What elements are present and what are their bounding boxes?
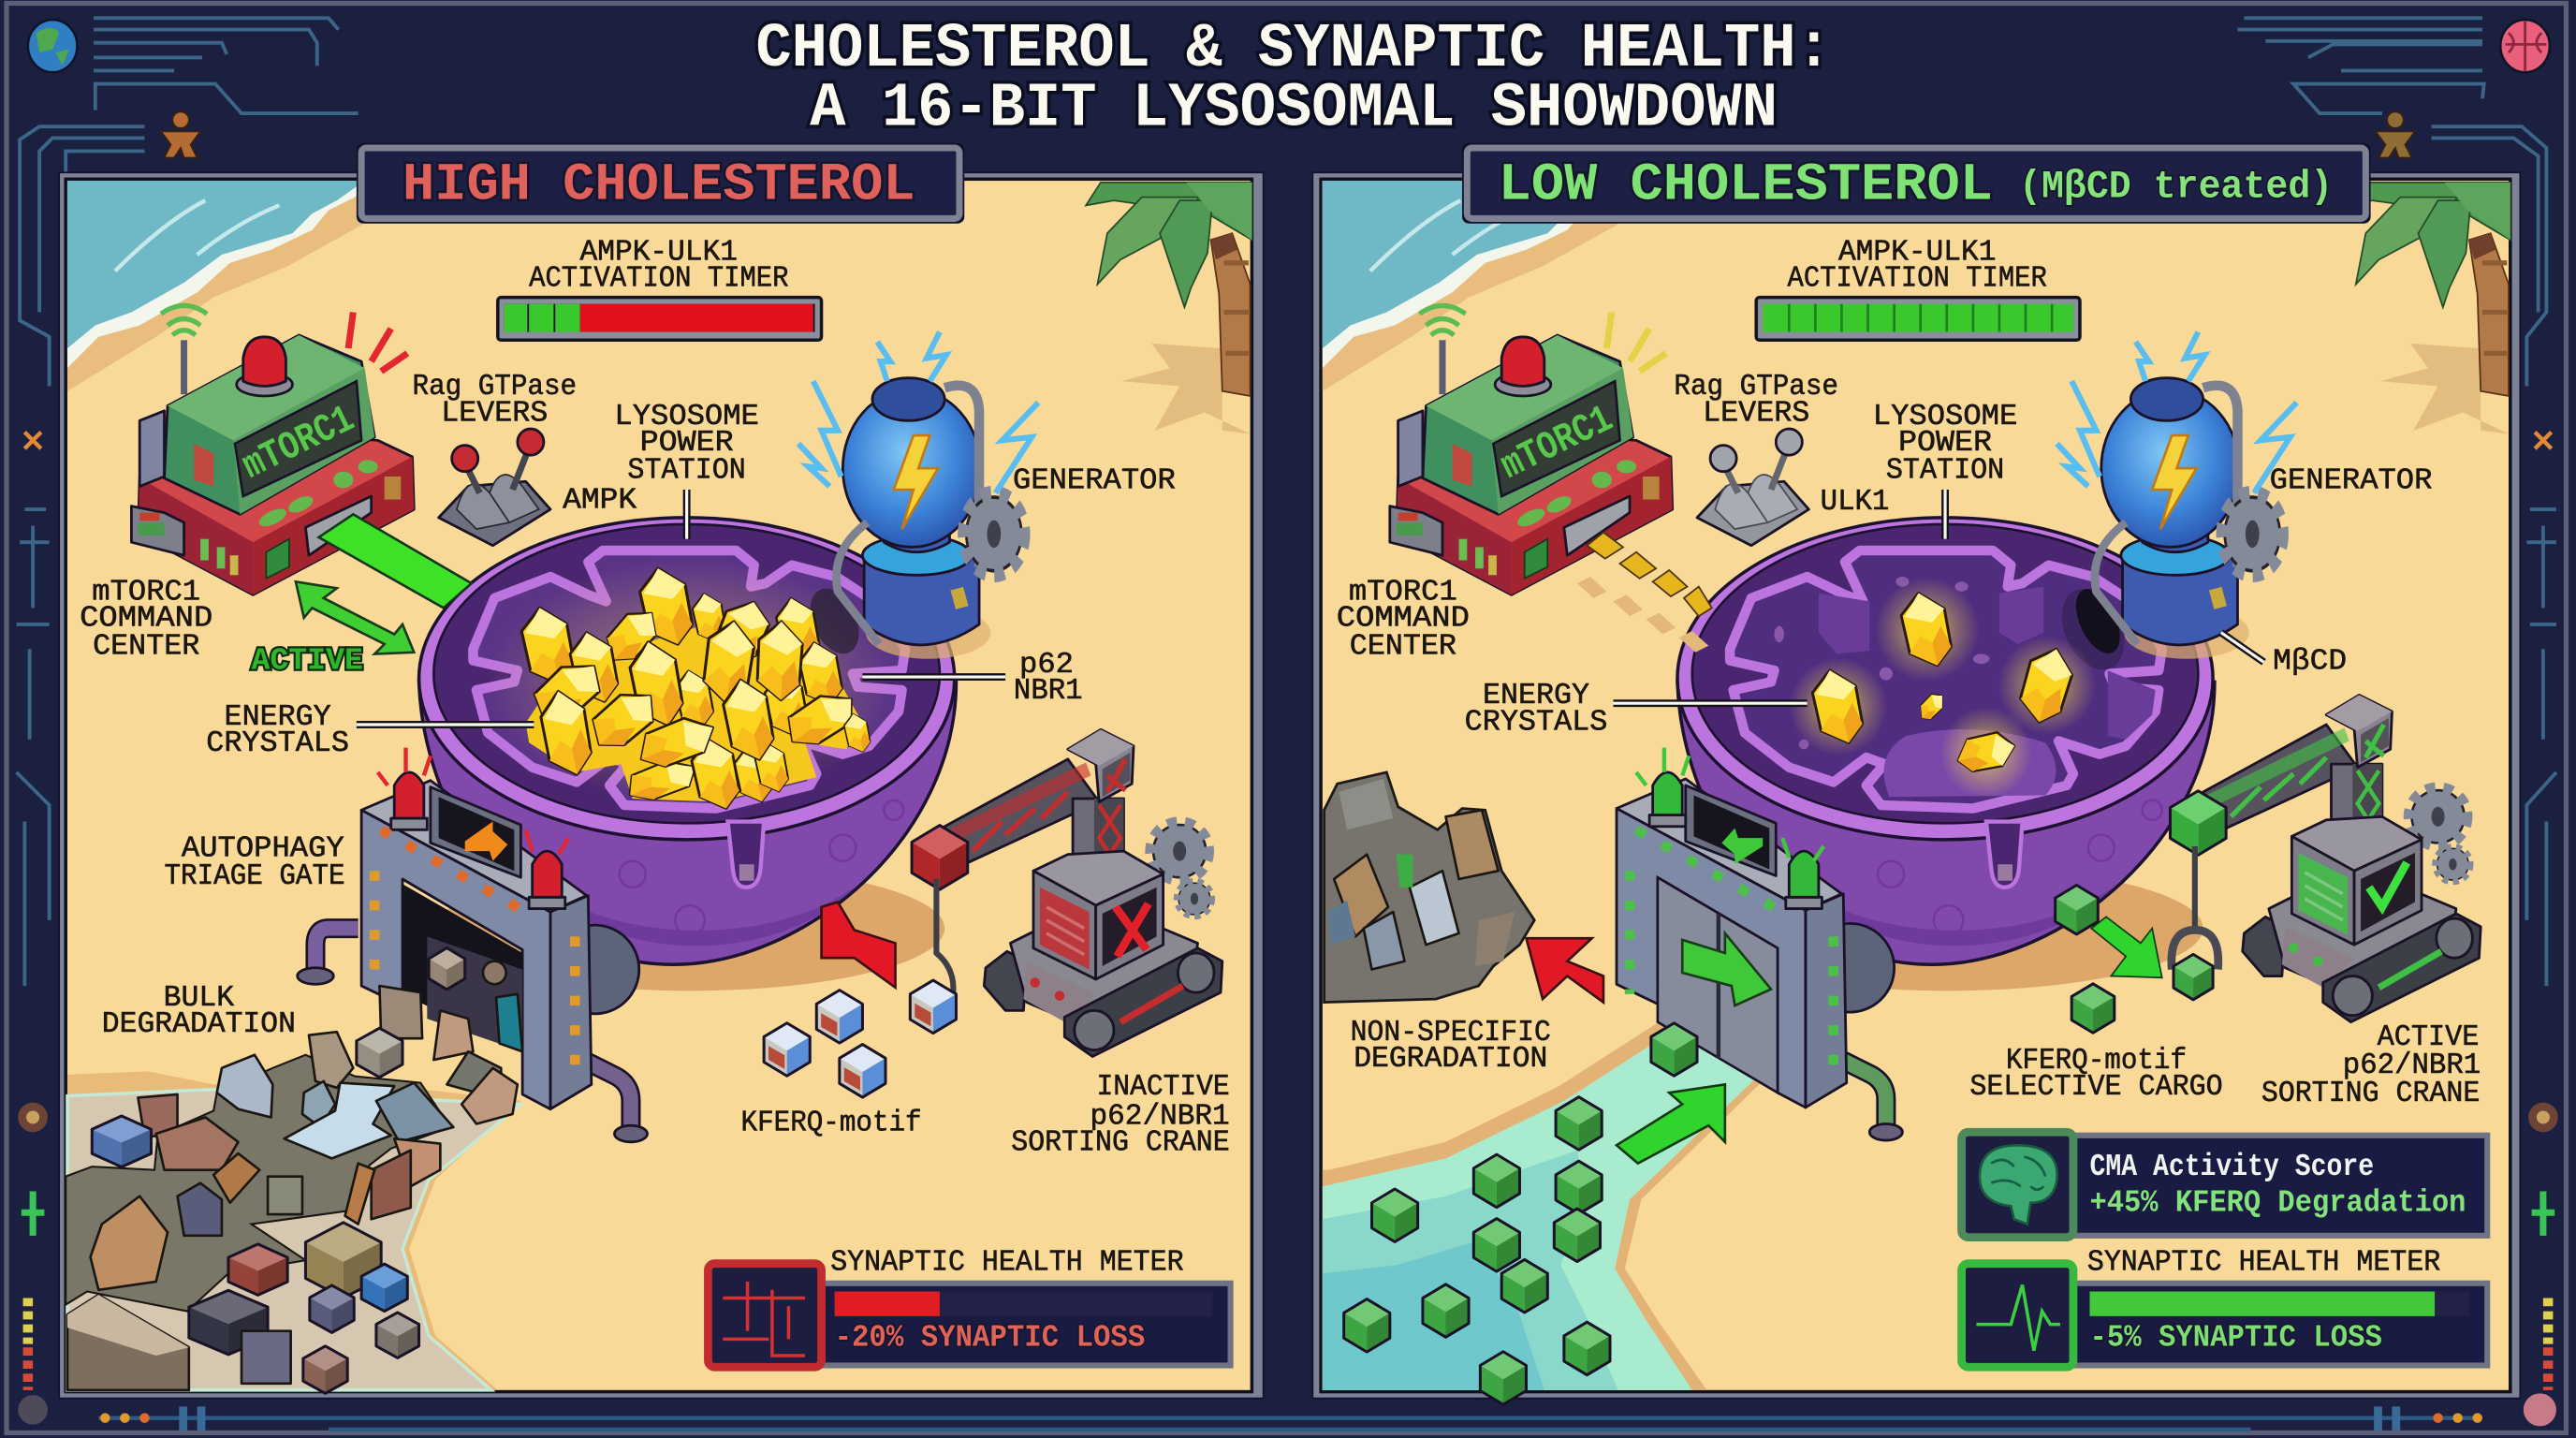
labels: ENERGY	[1483, 680, 1589, 712]
labels: STATION	[627, 455, 746, 488]
active crane	[2170, 695, 2481, 1022]
labels: p62/NBR1	[1090, 1100, 1230, 1133]
active label: ACTIVE	[252, 643, 363, 679]
labels: COMMAND	[80, 603, 212, 636]
autophagy gate closed	[1617, 748, 1902, 1140]
synaptic health meter: -5% SYNAPTIC LOSS	[2089, 1320, 2382, 1356]
ocean	[1323, 181, 1660, 391]
green cargo cubes	[1344, 1023, 1697, 1404]
labels: SYNAPTIC HEALTH METER	[830, 1247, 1184, 1280]
rubble beach	[66, 1055, 520, 1390]
green exit arrow	[1617, 1084, 1725, 1164]
open doorway	[402, 884, 522, 1051]
panel frame	[59, 172, 1264, 1399]
panel: low cholesterol	[1312, 143, 2520, 1404]
title	[755, 14, 1832, 144]
autophagy triage gate	[361, 748, 648, 1142]
dark hole	[2050, 579, 2136, 680]
CMA score panel: +45% KFERQ Degradation	[2089, 1186, 2466, 1222]
icon: brain	[1980, 1145, 2057, 1225]
timer bar	[1756, 298, 2080, 340]
labels: COMMAND	[1337, 603, 1470, 636]
palm tree	[1086, 183, 1251, 433]
labels: KFERQ-motif	[2006, 1045, 2187, 1078]
icon: gingerbread left	[161, 111, 200, 157]
icon: brain	[2500, 20, 2550, 72]
header: low cholesterol: (MβCD treated)	[2019, 165, 2333, 210]
green active beam	[318, 514, 472, 608]
left circuit decoration	[17, 18, 359, 986]
labels: LYSOSOME	[1873, 401, 2017, 433]
labels: NBR1	[1014, 675, 1083, 708]
CMA score panel: CMA Activity Score	[2089, 1150, 2374, 1185]
rag gtpase levers	[1697, 429, 1808, 546]
leader lines	[1614, 490, 2264, 703]
panel: high cholesterol	[59, 143, 1264, 1399]
labels: ACTIVATION TIMER	[1788, 262, 2047, 295]
header: low cholesterol	[1462, 143, 2371, 224]
labels: mTORC1	[92, 577, 200, 609]
kferq cubes	[764, 980, 956, 1097]
labels: SELECTIVE CARGO	[1969, 1071, 2223, 1104]
labels: Rag GTPase	[413, 371, 577, 404]
rubble pile	[67, 948, 522, 1393]
generator	[2056, 332, 2297, 659]
mTORC1 command center: mTORC1	[1494, 397, 1620, 489]
left edge icons	[18, 433, 48, 1425]
icon: gingerbread right	[2376, 111, 2415, 157]
labels: AMPK	[563, 484, 637, 517]
labels: DEGRADATION	[102, 1008, 296, 1041]
lysosome	[1677, 518, 2215, 990]
labels	[80, 236, 1230, 1280]
header: low cholesterol: LOW CHOLESTEROL	[1499, 154, 1993, 214]
labels: STATION	[1886, 455, 2004, 488]
labels: INACTIVE	[1097, 1071, 1230, 1104]
labels: ULK1	[1821, 486, 1889, 519]
inner glow	[485, 559, 896, 805]
labels: CENTER	[93, 631, 199, 664]
mTORC1 command center: mTORC1	[236, 397, 361, 489]
labels: POWER	[640, 427, 734, 460]
labels: LEVERS	[441, 397, 548, 430]
floor and walls	[1819, 587, 2156, 797]
labels: SORTING CRANE	[2261, 1078, 2480, 1110]
labels: mTORC1	[1349, 577, 1457, 609]
selective cargo cubes	[2056, 885, 2115, 1033]
labels: ACTIVATION TIMER	[529, 262, 788, 295]
ocean	[67, 181, 404, 391]
labels: AMPK-ULK1	[580, 236, 738, 269]
labels: CRYSTALS	[1465, 706, 1607, 739]
labels: NON-SPECIFIC	[1351, 1017, 1551, 1049]
green selective arrow	[2091, 917, 2162, 977]
red arrow	[1526, 938, 1603, 1003]
labels: AMPK-ULK1	[1838, 236, 1996, 269]
mTORC1 command center	[131, 305, 414, 594]
labels: ACTIVE	[2378, 1021, 2479, 1054]
labels: ENERGY	[225, 701, 331, 734]
timer bar	[498, 298, 822, 340]
labels: LEVERS	[1703, 397, 1809, 430]
synaptic health meter: -20% SYNAPTIC LOSS	[835, 1320, 1145, 1356]
synaptic health meter	[708, 1264, 1231, 1367]
green water stream	[1323, 1012, 1773, 1390]
labels: SORTING CRANE	[1011, 1127, 1230, 1160]
red arrow	[822, 902, 896, 988]
labels	[1337, 236, 2481, 1280]
non-specific rubble	[1325, 772, 1534, 1003]
labels: POWER	[1898, 427, 1992, 460]
labels: p62/NBR1	[2343, 1049, 2481, 1082]
labels: LYSOSOME	[614, 401, 759, 433]
title: CHOLESTEROL & SYNAPTIC HEALTH:	[755, 14, 1832, 85]
leader lines	[357, 490, 1005, 725]
energy crystals pile	[518, 568, 871, 809]
title: A 16-BIT LYSOSOMAL SHOWDOWN	[810, 73, 1778, 144]
header: high cholesterol	[357, 143, 964, 224]
dark hole	[800, 580, 869, 661]
green door arrow	[1682, 933, 1771, 1005]
labels: p62	[1019, 649, 1074, 682]
labels: CENTER	[1350, 631, 1456, 664]
labels: BULK	[164, 982, 234, 1015]
crista membrane	[1730, 550, 2162, 809]
labels: Rag GTPase	[1674, 371, 1838, 404]
header: high cholesterol: HIGH CHOLESTEROL	[402, 154, 915, 214]
icon: globe	[28, 20, 77, 72]
synaptic health meter	[1962, 1264, 2487, 1367]
specks	[1775, 577, 1989, 749]
bottom bar decoration	[98, 1406, 2482, 1431]
left pipe	[298, 929, 359, 984]
labels: GENERATOR	[1013, 464, 1176, 497]
mTORC1 command center	[1390, 305, 1673, 594]
panel frame	[1312, 172, 2520, 1399]
labels: AUTOPHAGY	[182, 832, 344, 865]
lysosome	[419, 518, 956, 990]
labels: DEGRADATION	[1354, 1043, 1547, 1076]
palm tree	[2345, 183, 2510, 433]
labels: KFERQ-motif	[741, 1108, 922, 1140]
labels: MβCD	[2273, 645, 2347, 678]
rag gtpase levers	[439, 429, 550, 546]
double arrow	[296, 581, 414, 654]
labels: GENERATOR	[2270, 464, 2432, 497]
inactive dashed beam	[1577, 533, 1712, 653]
generator	[798, 332, 1038, 659]
right circuit decoration	[2237, 18, 2556, 986]
energy crystals	[1789, 577, 2097, 799]
CMA score panel	[1962, 1132, 2487, 1238]
labels: TRIAGE GATE	[165, 860, 345, 893]
crista membrane	[473, 550, 905, 809]
labels: SYNAPTIC HEALTH METER	[2087, 1247, 2440, 1280]
inactive crane	[912, 729, 1222, 1057]
right edge icons	[2524, 433, 2558, 1426]
labels: CRYSTALS	[206, 727, 349, 760]
closed doors	[1658, 877, 1778, 1093]
